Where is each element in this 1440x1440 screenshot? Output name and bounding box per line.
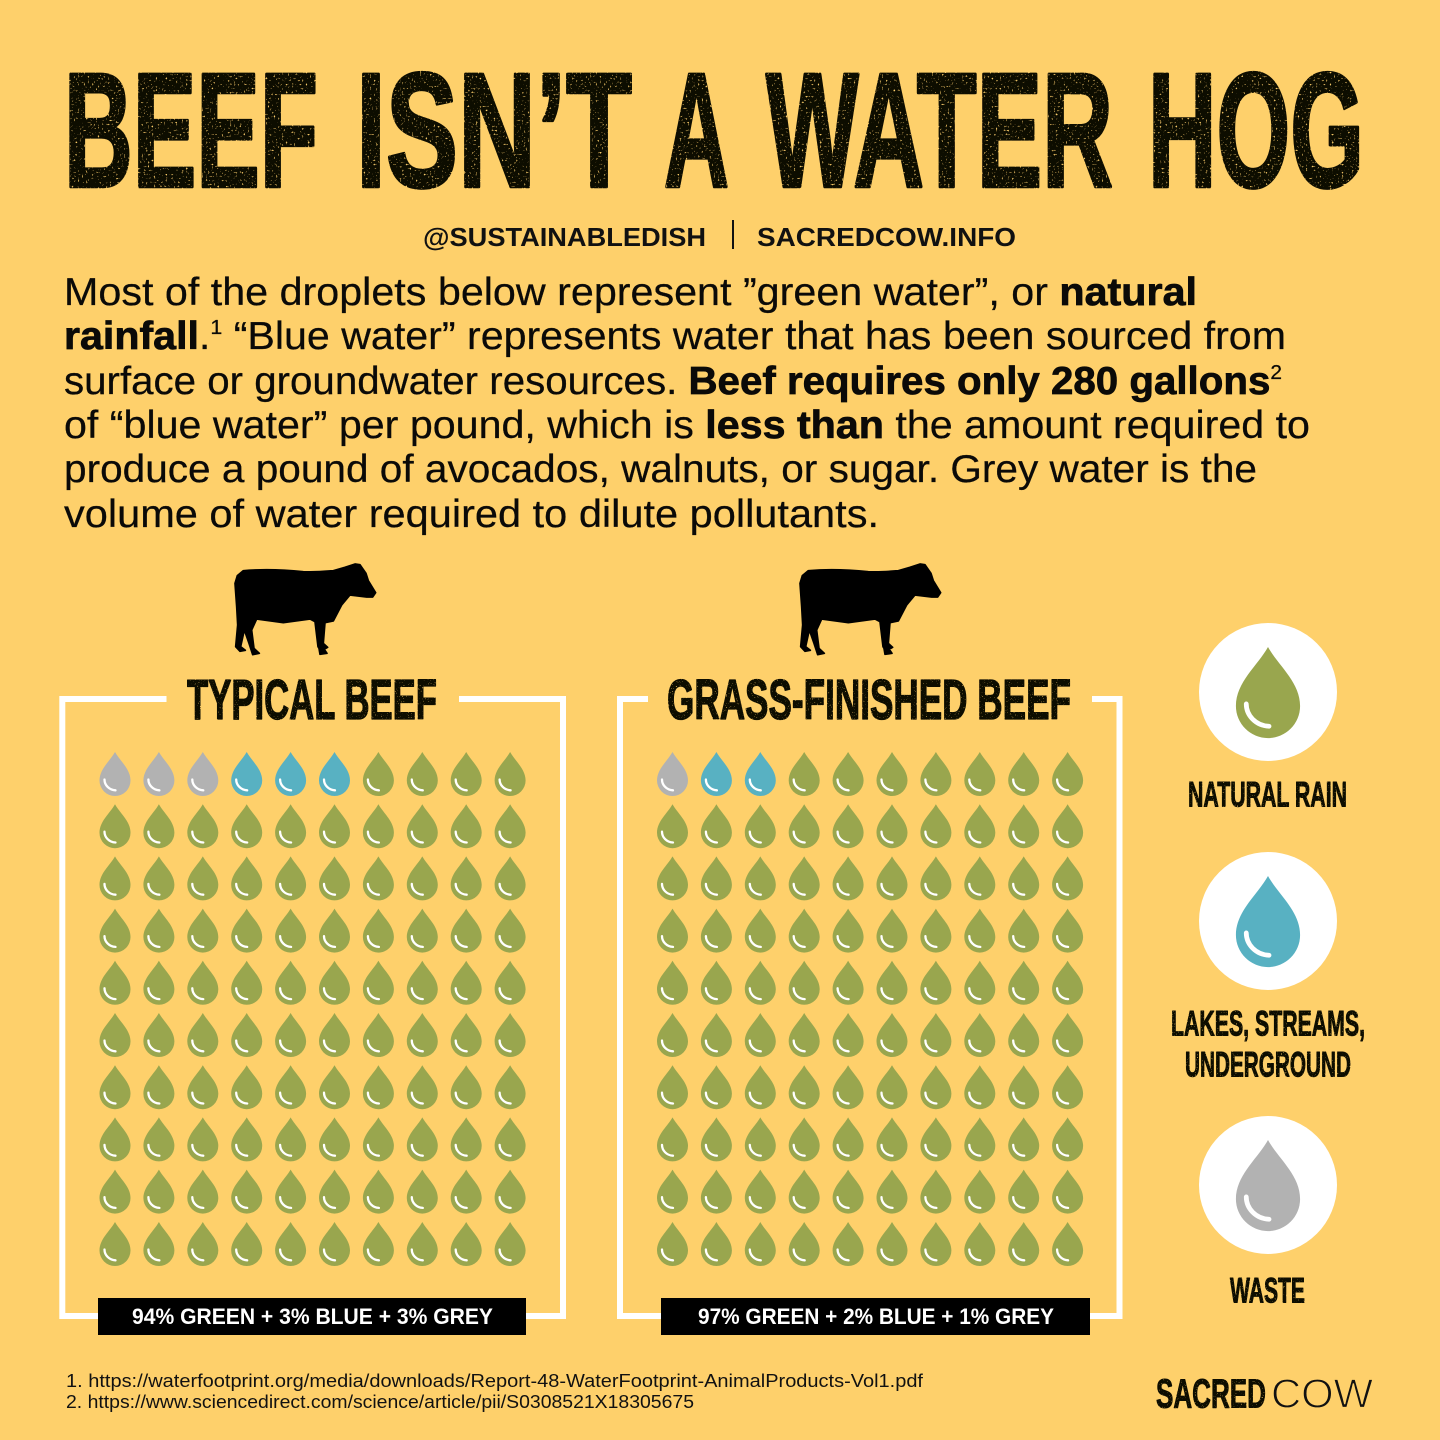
social handles: SACREDCOW.INFO (757, 222, 1016, 252)
title: BEEF (64, 38, 318, 222)
droplet grid: grass-finished beef (657, 752, 1083, 1266)
panel frame (620, 699, 1120, 1316)
intro paragraph: surface or groundwater resources. Beef requires only 280 gallons (64, 360, 1245, 403)
intro paragraph: volume of water required to dilute pollutants. (64, 493, 879, 536)
social handles: @SUSTAINABLEDISH (423, 222, 706, 252)
social handles (423, 220, 1016, 252)
intro paragraph: produce a pound of avocados, walnuts, or sugar. Grey water is the (64, 448, 1257, 491)
icon: natural rain droplet (1199, 623, 1337, 761)
title (64, 38, 1364, 222)
intro paragraph: “Blue water” represents water that has been sourced from (222, 315, 1286, 358)
footnotes: 2. https://www.sciencedirect.com/science/article/pii/S0308521X18305675 (66, 1391, 694, 1412)
percentage bar: grass-finished beef (661, 1298, 1090, 1335)
intro paragraph: rainfall. (64, 315, 210, 358)
panel: grass-finished beef (620, 668, 1120, 1335)
title: WATER (766, 38, 1113, 222)
intro paragraph: of “blue water” per pound, which is less than the amount required to (64, 404, 1310, 447)
percentage bar: typical beef: 94% GREEN + 3% BLUE + 3% GREY (132, 1304, 493, 1329)
title: ISN’T (356, 38, 632, 222)
intro paragraph (64, 271, 1310, 536)
intro paragraph: 2 (1270, 362, 1282, 384)
icon: lakes droplet (1199, 852, 1337, 990)
legend (1171, 623, 1365, 1310)
panel: typical beef (62, 668, 563, 1335)
logo: Sacred Cow: SACRED (1156, 1370, 1266, 1416)
intro paragraph: Most of the droplets below represent ”green water”, or natural (64, 271, 1197, 314)
droplet grid: typical beef (100, 752, 526, 1266)
footnotes: 1. https://waterfootprint.org/media/downloads/Report-48-WaterFootprint-AnimalProducts-Vol1.pdf (66, 1370, 924, 1391)
title: A (664, 38, 729, 222)
legend label: lakes, streams, underground (1171, 1004, 1365, 1084)
footnotes (66, 1370, 924, 1412)
percentage bar: typical beef (98, 1298, 526, 1335)
legend label: waste: WASTE (1230, 1272, 1305, 1310)
heading: typical beef: TYPICAL BEEF (187, 668, 437, 732)
panel frame (62, 699, 563, 1316)
intro paragraph: 1 (210, 317, 222, 339)
icon: cow, typical beef (235, 564, 376, 655)
icon: cow, grass-finished beef (800, 564, 941, 655)
logo: Sacred Cow: COW (1271, 1370, 1373, 1416)
icon: waste droplet (1199, 1116, 1337, 1254)
heading: grass-finished beef: GRASS-FINISHED BEEF (667, 668, 1071, 732)
percentage bar: grass-finished beef: 97% GREEN + 2% BLUE + 1% GREY (698, 1304, 1054, 1329)
